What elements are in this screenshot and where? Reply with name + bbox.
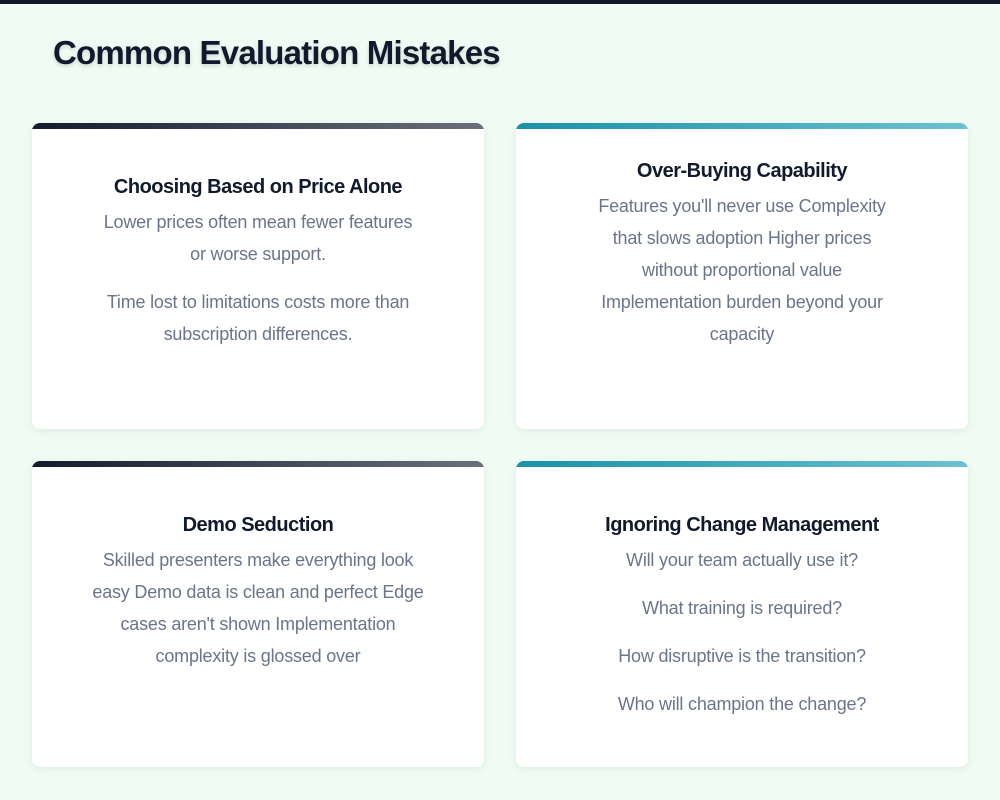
panel: price alone: [32, 123, 484, 429]
text: over-buying: without proportional value: [642, 260, 842, 280]
text: price: Lower prices often mean fewer features: [104, 212, 412, 232]
panel: demo seduction: [32, 461, 484, 767]
text: demo: complexity is glossed over: [156, 646, 360, 666]
text: change: [618, 550, 866, 714]
title: Common Evaluation Mistakes: [53, 34, 500, 71]
heading: change: Ignoring Change Management: [605, 514, 879, 536]
heading: over-buying: Over-Buying Capability: [637, 160, 847, 182]
text: demo: easy Demo data is clean and perfect Edge: [92, 582, 424, 602]
text: demo: Skilled presenters make everything look: [103, 550, 413, 570]
heading: price: Choosing Based on Price Alone: [114, 176, 402, 198]
text: change: What training is required?: [642, 598, 842, 618]
text: price: or worse support. Time lost to limitations costs more than: [107, 244, 409, 312]
text: over-buying: [598, 196, 886, 344]
text: price: [104, 212, 412, 344]
text: price: subscription differences.: [164, 324, 352, 344]
text: over-buying: capacity: [710, 324, 774, 344]
heading: demo: Demo Seduction: [183, 514, 333, 536]
panel: change management: [516, 461, 968, 767]
text: change: How disruptive is the transition?: [618, 646, 866, 666]
text: over-buying: that slows adoption Higher prices: [613, 228, 871, 248]
text: demo: cases aren't shown Implementation: [120, 614, 395, 634]
text: over-buying: Features you'll never use Complexity: [598, 196, 886, 216]
panel: over-buying: [516, 123, 968, 429]
text: over-buying: Implementation burden beyond your: [601, 292, 883, 312]
text: demo: [92, 550, 424, 666]
text: change: Who will champion the change?: [618, 694, 866, 714]
text: change: Will your team actually use it?: [626, 550, 858, 570]
